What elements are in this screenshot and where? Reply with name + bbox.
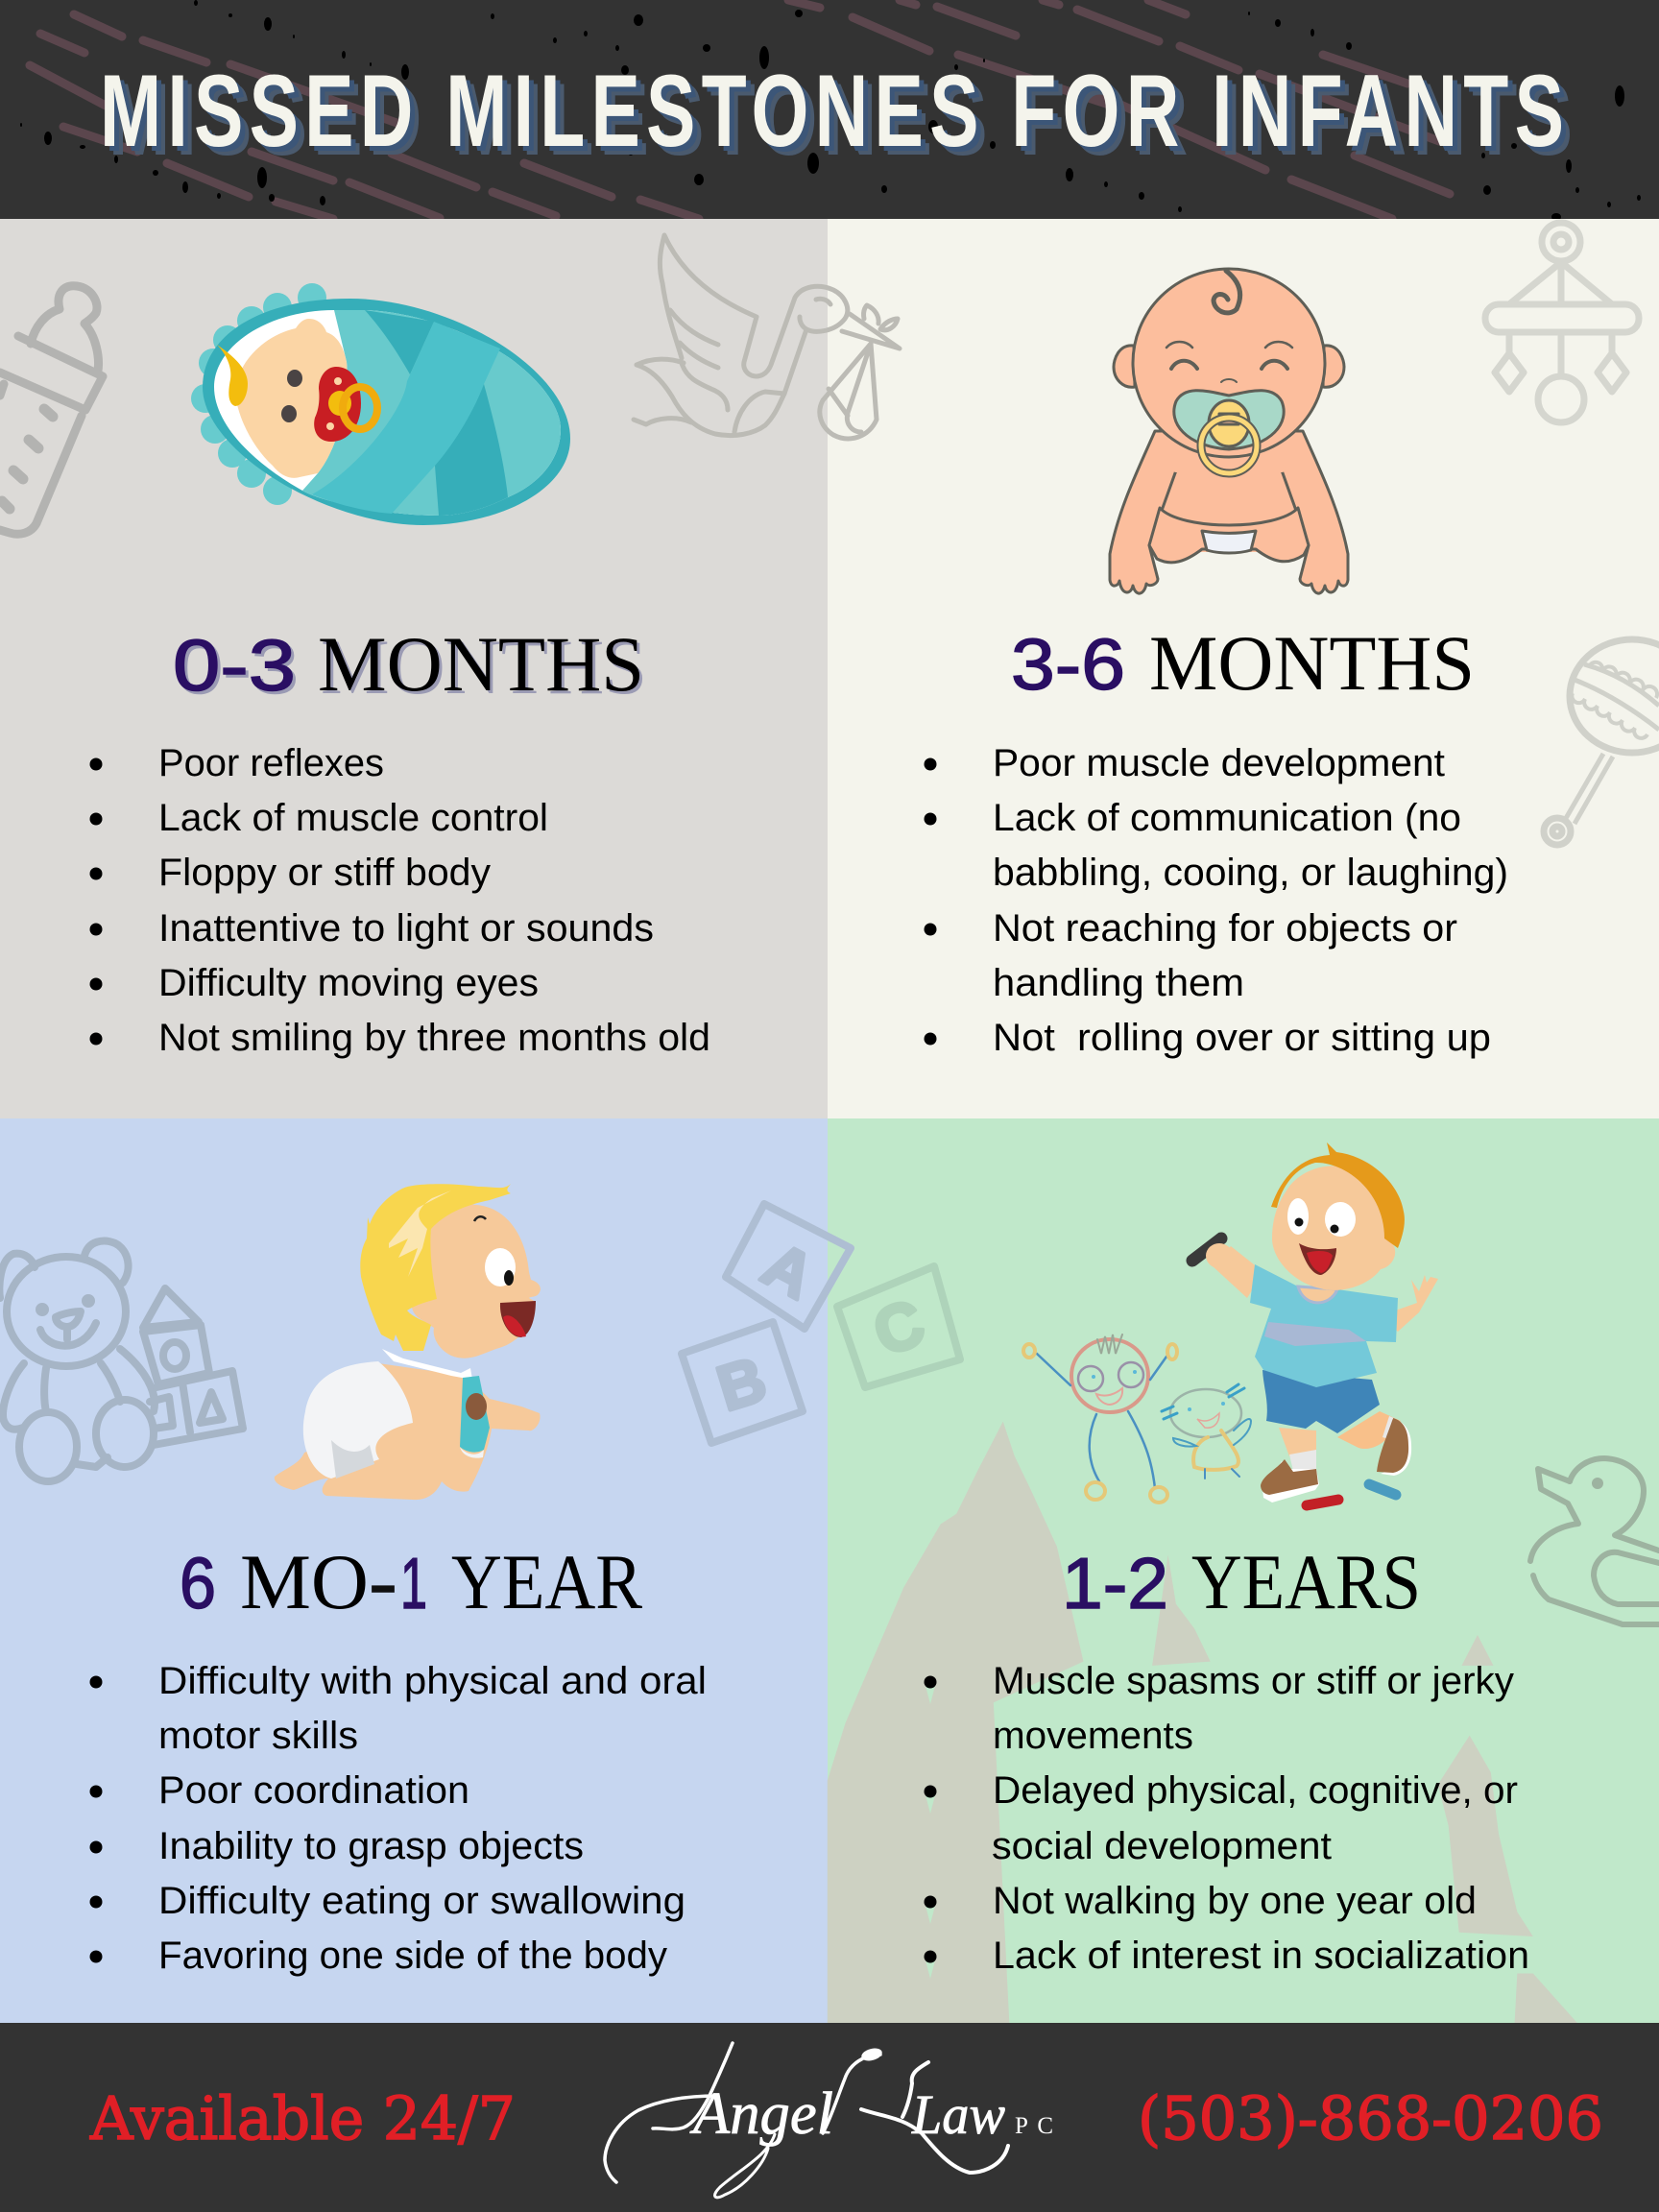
heading: 1-2 years: YEARS bbox=[1191, 1538, 1421, 1625]
list: 3-6 months symptoms bbox=[924, 742, 1508, 1059]
icon: crib mobile bbox=[1485, 223, 1639, 422]
list: 3-6 months symptoms: Not reaching for objects or bbox=[993, 907, 1457, 950]
heading: 6 mo-1 year bbox=[180, 1538, 642, 1625]
heading: 0-3 months bbox=[173, 620, 647, 710]
heading: 3-6 months: 3-6 bbox=[1011, 624, 1125, 705]
logo: Angel Law PC: PC bbox=[1015, 2113, 1053, 2139]
heading: 3-6 months bbox=[1011, 619, 1475, 707]
logo: Angel Law PC bbox=[605, 2043, 1053, 2198]
heading: 0-3 months: 0-3 bbox=[176, 628, 299, 709]
icon: block A bbox=[726, 1204, 851, 1329]
panel: 0-3 months bbox=[0, 219, 828, 1118]
list: 1-2 years symptoms: Lack of interest in socialization bbox=[993, 1935, 1529, 1977]
icon: baby bottle bbox=[0, 286, 103, 534]
list: 1-2 years symptoms: Not walking by one year old bbox=[993, 1880, 1477, 1922]
icon: stork carrying bundle bbox=[634, 235, 900, 439]
illustration: crawling baby bbox=[275, 1184, 541, 1500]
list: 0-3 months symptoms: Inattentive to light or sounds bbox=[158, 907, 654, 950]
list: 1-2 years symptoms: social development bbox=[992, 1825, 1332, 1867]
icon: crayons bbox=[1307, 1484, 1396, 1505]
icon: teddy bear with blocks bbox=[0, 1241, 243, 1481]
logo: Angel Law PC: Law bbox=[911, 2083, 1005, 2146]
panel: 6 mo-1 year bbox=[0, 1118, 828, 2023]
icon: block C bbox=[837, 1266, 960, 1387]
text: phone number: (503)-868-0206 bbox=[1138, 2083, 1603, 2153]
list: 0-3 months symptoms: Floppy or stiff body bbox=[158, 852, 491, 894]
list: 1-2 years symptoms: movements bbox=[993, 1715, 1193, 1757]
list: 6 mo-1 year symptoms: Inability to grasp objects bbox=[158, 1825, 584, 1867]
list: 6 mo-1 year symptoms: Favoring one side of the body bbox=[158, 1935, 667, 1977]
title: MISSED MILESTONES FOR INFANTS bbox=[100, 54, 1564, 168]
heading: 3-6 months: MONTHS bbox=[1149, 619, 1475, 707]
list: 1-2 years symptoms: Muscle spasms or stiff or jerky bbox=[993, 1660, 1514, 1702]
header band bbox=[0, 0, 1659, 221]
list: 3-6 months symptoms: Not rolling over or sitting up bbox=[993, 1017, 1491, 1059]
illustration: stick-figure crayon drawings bbox=[1023, 1334, 1251, 1503]
illustration: toddler with crayon bbox=[1192, 1142, 1438, 1503]
heading: 0-3 months: 0-3 bbox=[173, 625, 296, 706]
list: 0-3 months symptoms: Not smiling by three months old bbox=[158, 1017, 710, 1059]
panel: 3-6 months bbox=[828, 219, 1659, 1118]
list: 0-3 months symptoms: Poor reflexes bbox=[158, 742, 384, 784]
icon: block A: A bbox=[752, 1228, 826, 1312]
list: 6 mo-1 year symptoms: Poor coordination bbox=[158, 1769, 469, 1812]
illustration: swaddled baby bbox=[191, 283, 570, 525]
icon: rattle bbox=[1544, 639, 1659, 845]
list: 3-6 months symptoms: babbling, cooing, or laughing) bbox=[993, 852, 1508, 894]
title: MISSED MILESTONES FOR INFANTS bbox=[105, 59, 1569, 173]
list: 6 mo-1 year symptoms: motor skills bbox=[158, 1715, 358, 1757]
list: 0-3 months symptoms: Lack of muscle control bbox=[158, 797, 548, 839]
text: availability: Available 24/7 bbox=[89, 2083, 516, 2153]
heading: 1-2 years: 1-2 bbox=[1062, 1543, 1168, 1623]
background mountains bbox=[828, 1422, 1578, 2024]
list: 0-3 months symptoms: Difficulty moving eyes bbox=[158, 962, 539, 1004]
list: 6 mo-1 year symptoms: Difficulty with physical and oral bbox=[158, 1660, 707, 1702]
logo: Angel Law PC: Angel bbox=[689, 2081, 833, 2147]
heading: 6 mo-1 year: YEAR bbox=[451, 1538, 642, 1625]
heading: 0-3 months: MONTHS bbox=[318, 620, 644, 708]
illustration: smiling baby with pacifier bbox=[1110, 269, 1348, 593]
panel: 1-2 years bbox=[828, 1118, 1659, 2024]
icon: block B: B bbox=[709, 1343, 774, 1424]
list: 6 mo-1 year symptoms bbox=[90, 1660, 707, 1977]
heading: 6 mo-1 year: 6 bbox=[180, 1543, 216, 1623]
list: 3-6 months symptoms: handling them bbox=[993, 962, 1244, 1004]
heading: 0-3 months: MONTHS bbox=[321, 623, 647, 710]
list: 1-2 years symptoms: Delayed physical, cognitive, or bbox=[993, 1769, 1518, 1812]
list: 3-6 months symptoms: Poor muscle development bbox=[993, 742, 1445, 784]
heading: 6 mo-1 year: - bbox=[369, 1543, 397, 1623]
list: 3-6 months symptoms: Lack of communication (no bbox=[993, 797, 1461, 839]
heading: 6 mo-1 year: MO bbox=[240, 1538, 369, 1625]
title: MISSED MILESTONES FOR INFANTS bbox=[108, 62, 1573, 177]
icon: block C: C bbox=[864, 1286, 933, 1370]
heading: 1-2 years bbox=[1062, 1538, 1421, 1625]
footer band bbox=[0, 2023, 1659, 2212]
list: 6 mo-1 year symptoms: Difficulty eating or swallowing bbox=[158, 1880, 685, 1922]
heading: 6 mo-1 year: 1 bbox=[400, 1543, 427, 1623]
list: 0-3 months symptoms bbox=[90, 742, 710, 1059]
icon: block B bbox=[682, 1322, 803, 1443]
list: 1-2 years symptoms bbox=[924, 1660, 1529, 1979]
icon: rubber duck bbox=[1530, 1458, 1659, 1624]
